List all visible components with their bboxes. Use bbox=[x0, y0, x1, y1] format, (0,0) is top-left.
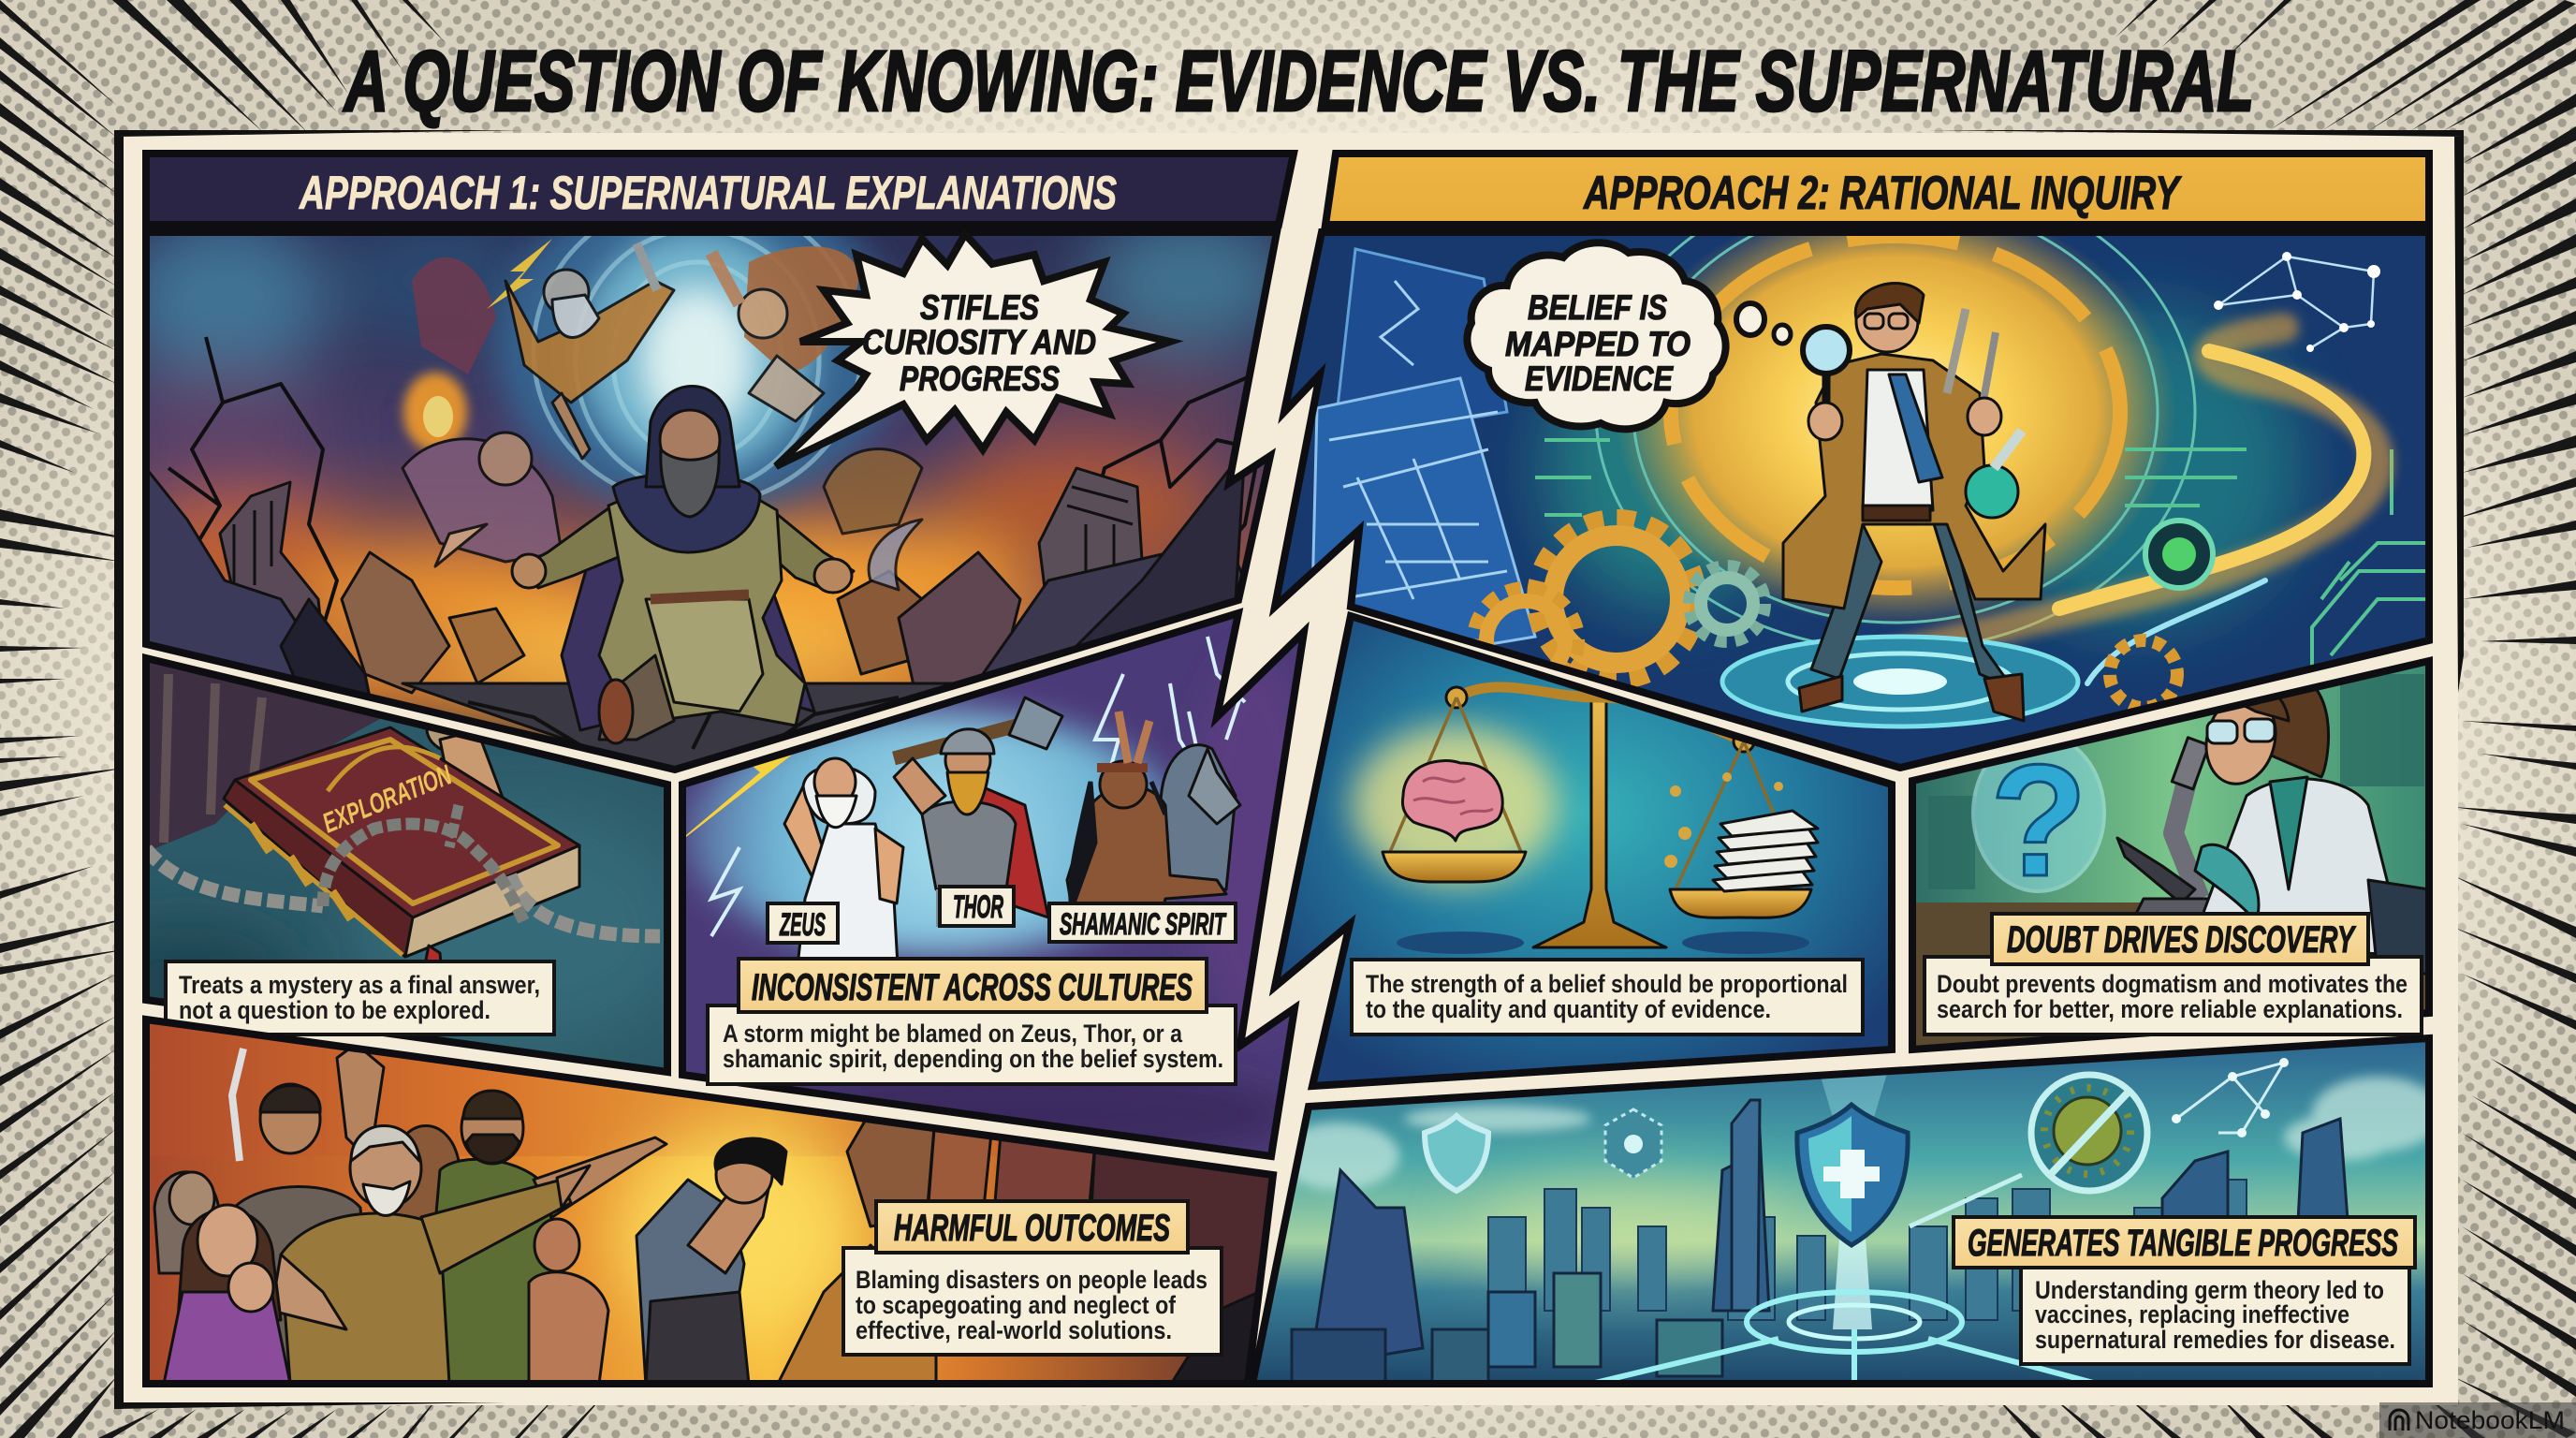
caption: germ theory: supernatural remedies for disease. bbox=[2035, 1326, 2395, 1354]
scene: angry gods and ruin bbox=[150, 236, 1273, 766]
green orb bbox=[2145, 521, 2213, 588]
panel: generates tangible progress bbox=[1245, 1030, 2443, 1390]
callout: stifles curiosity: CURIOSITY AND bbox=[862, 323, 1096, 361]
panel: approach 2 rational inquiry bbox=[1245, 154, 2443, 1390]
sea creature bbox=[824, 449, 922, 590]
figure: accused man bbox=[637, 1138, 786, 1386]
panel: chained book bbox=[142, 653, 671, 1077]
rocks bbox=[150, 468, 1245, 695]
panel: harmful outcomes bbox=[146, 1016, 1279, 1390]
callout: stifles curiosity: STIFLES bbox=[920, 288, 1039, 327]
platform bbox=[1722, 637, 2078, 726]
caption: storm body text: A storm might be blamed on Zeus, Thor, or a bbox=[723, 1020, 1183, 1048]
book title: EXPLORATION bbox=[318, 759, 457, 839]
caption: harmful body text: to scapegoating and neglect of bbox=[856, 1291, 1177, 1319]
halo bbox=[1615, 197, 2176, 627]
callout: belief is mapped to evidence: BELIEF IS bbox=[1528, 288, 1667, 327]
heading: inconsistent across cultures bbox=[739, 959, 1207, 1012]
caption: harmful body text: Blaming disasters on people leads bbox=[856, 1266, 1208, 1294]
scientist illustration bbox=[1910, 655, 2434, 1058]
ruins bbox=[777, 1095, 1273, 1386]
caption: strength of belief: The strength of a belief should be proportional bbox=[1366, 970, 1848, 998]
caption: storm body text: shamanic spirit, depending on the belief system. bbox=[723, 1045, 1223, 1073]
left pan and brain bbox=[1383, 697, 1805, 889]
panel: scales of evidence bbox=[1273, 609, 1900, 1095]
skyline front bbox=[1292, 1100, 2378, 1386]
heading: approach 2: APPROACH 2: RATIONAL INQUIRY bbox=[1582, 167, 2183, 219]
caption: strength of belief: to the quality and quantity of evidence. bbox=[1366, 995, 1771, 1023]
caption: doubt body text: Doubt prevents dogmatism and motivates the bbox=[1937, 970, 2408, 998]
storm gods illustration bbox=[661, 609, 1320, 1170]
tag: shamanic spirit bbox=[1049, 903, 1236, 942]
book bbox=[224, 727, 579, 974]
flame spirit bbox=[402, 373, 562, 566]
figure: zeus bbox=[784, 758, 903, 983]
caption: harmful body text bbox=[843, 1248, 1222, 1355]
shield with cross bbox=[1797, 1105, 1908, 1245]
callout: stifles curiosity bbox=[776, 234, 1170, 466]
heading: generates tangible progress bbox=[1954, 1217, 2415, 1268]
figure: shaman and wolf bbox=[1067, 712, 1240, 936]
figure: bearded man pointing bbox=[421, 1091, 666, 1386]
crowd back bbox=[154, 1044, 459, 1386]
heading: harmful outcomes: HARMFUL OUTCOMES bbox=[894, 1208, 1170, 1249]
investigator bbox=[1783, 284, 2045, 721]
panel: approach 1 supernatural bbox=[75, 154, 1320, 1390]
heading: approach 2 bbox=[1325, 154, 2429, 225]
caption: treats a mystery: not a question to be explored. bbox=[179, 996, 490, 1024]
caption: treats a mystery: Treats a mystery as a final answer, bbox=[179, 971, 540, 999]
constellation bbox=[2214, 252, 2380, 352]
mob scene bbox=[146, 1016, 1279, 1390]
watermark: NotebookLM: NotebookLM bbox=[2415, 1406, 2565, 1434]
constellation bbox=[2172, 1058, 2289, 1137]
heading: approach 1: APPROACH 1: SUPERNATURAL EXPLANATIONS bbox=[299, 167, 1117, 219]
god with lightning bbox=[412, 239, 674, 459]
caption: storm body text bbox=[708, 1005, 1236, 1084]
heading: doubt drives discovery bbox=[1992, 914, 2368, 964]
crossed out virus bbox=[1910, 1075, 2147, 1226]
hand bbox=[427, 704, 505, 824]
small shield icon bbox=[1425, 1116, 1488, 1191]
balance stand bbox=[1446, 660, 1754, 947]
chain bbox=[146, 805, 660, 936]
tag: zeus bbox=[768, 903, 838, 943]
light beam and rings bbox=[1591, 1030, 2097, 1384]
caption: doubt body text bbox=[1925, 957, 2422, 1034]
caption: harmful body text: effective, real-world solutions. bbox=[856, 1316, 1172, 1344]
figure: thor bbox=[894, 697, 1062, 927]
right pan and papers bbox=[1664, 772, 1818, 917]
gears bbox=[1475, 521, 2177, 708]
tag: thor: THOR bbox=[953, 889, 1003, 925]
callout: belief is mapped to evidence: EVIDENCE bbox=[1525, 360, 1674, 398]
panel: inconsistent across cultures bbox=[661, 609, 1320, 1170]
tag: shamanic spirit: SHAMANIC SPIRIT bbox=[1060, 907, 1227, 941]
circuit traces bbox=[1535, 440, 2429, 683]
callout: stifles curiosity: PROGRESS bbox=[900, 360, 1060, 398]
gold light path bbox=[1835, 328, 2378, 683]
caption: doubt body text: search for better, more reliable explanations. bbox=[1937, 995, 2403, 1023]
future city illustration bbox=[1245, 1030, 2443, 1390]
question mark hologram: ? bbox=[1990, 732, 2087, 910]
panel: doubt drives discovery bbox=[1910, 655, 2434, 1058]
kneeling man bbox=[512, 386, 854, 743]
hexagon icon bbox=[1605, 1109, 1661, 1178]
skyline back bbox=[1488, 1180, 2247, 1320]
caption: germ theory: vaccines, replacing ineffective bbox=[2035, 1300, 2349, 1328]
cracks bbox=[168, 337, 1259, 627]
heading: approach 1 bbox=[146, 154, 1294, 225]
ruin left bbox=[219, 481, 321, 619]
caption: strength of belief bbox=[1352, 960, 1863, 1034]
ruin right bbox=[1037, 466, 1144, 586]
heading: doubt drives discovery: DOUBT DRIVES DISCOVERY bbox=[2007, 919, 2356, 961]
caption: germ theory: Understanding germ theory led to bbox=[2035, 1276, 2384, 1304]
figure: frightened girl bbox=[164, 1205, 290, 1384]
scientist bbox=[2191, 674, 2429, 974]
callout: belief is mapped to evidence: MAPPED TO bbox=[1505, 325, 1690, 363]
tag: thor bbox=[940, 887, 1014, 926]
callout: belief is mapped to evidence bbox=[1467, 242, 1791, 429]
scene: investigator with evidence bbox=[1273, 173, 2434, 775]
caption: germ theory bbox=[2021, 1268, 2409, 1364]
goddess bbox=[711, 246, 858, 421]
microscope bbox=[2117, 738, 2228, 917]
caption: treats a mystery bbox=[166, 961, 554, 1034]
lightning bolt bbox=[661, 693, 820, 857]
heading: harmful outcomes bbox=[876, 1201, 1188, 1253]
scale illustration bbox=[1273, 609, 1900, 1095]
ground bbox=[401, 682, 953, 766]
blueprints bbox=[1310, 249, 1535, 674]
tag: zeus: ZEUS bbox=[779, 907, 826, 943]
watermark: NotebookLM bbox=[2379, 1402, 2576, 1438]
heading: inconsistent across cultures: INCONSISTENT ACROSS CULTURES bbox=[752, 967, 1193, 1008]
book illustration bbox=[150, 663, 665, 1067]
figure: elder bbox=[271, 1125, 590, 1384]
